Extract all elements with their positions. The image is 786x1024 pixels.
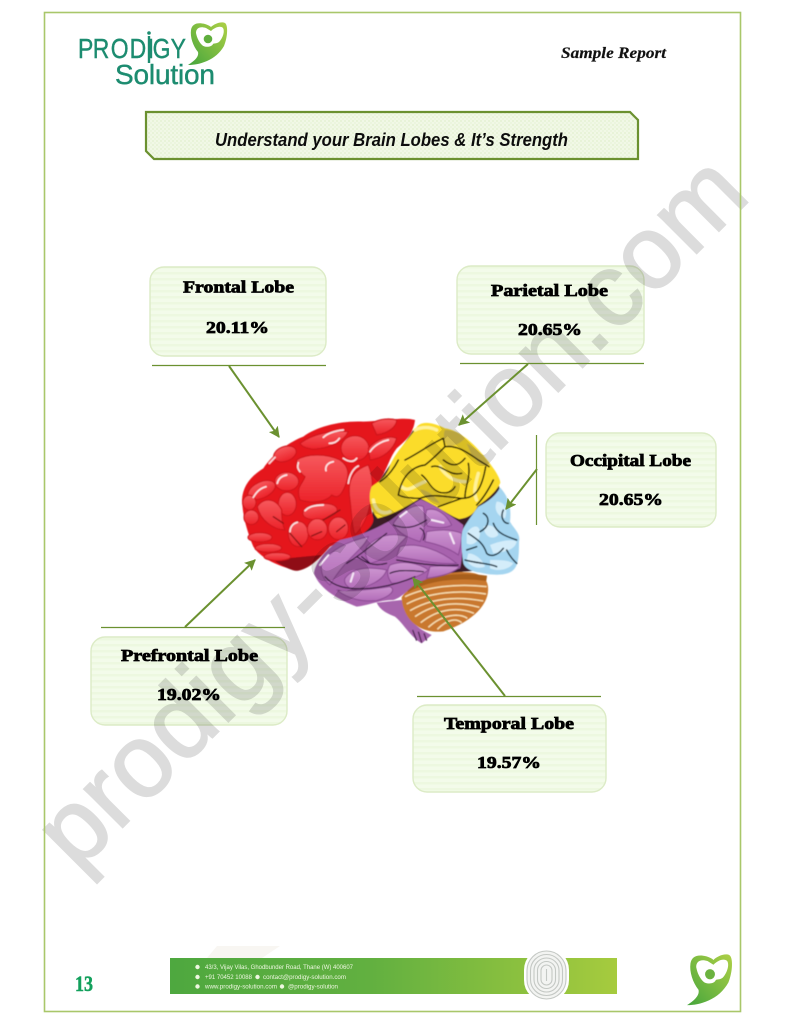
parietal lobe (370, 423, 500, 519)
card: temporal lobe: Temporal Lobe (444, 714, 575, 733)
footer band: @prodigy-solution (288, 984, 338, 990)
occipital lobe (461, 487, 519, 575)
brain stem (377, 600, 432, 643)
footer band: contact@prodigy-solution.com (263, 975, 346, 981)
logo: Prodigy Solution: PRODIGY (78, 34, 186, 65)
card: parietal lobe: Parietal Lobe (491, 281, 609, 300)
card: prefrontal lobe: 19.02% (157, 685, 221, 704)
card: frontal lobe: Frontal Lobe (183, 278, 295, 296)
card: temporal lobe (413, 705, 606, 792)
footer band: +91 70452 10088 (205, 975, 253, 981)
connectors and arrows (101, 364, 644, 696)
frontal lobe (242, 419, 415, 571)
card: occipital lobe: Occipital Lobe (570, 451, 691, 470)
card: occipital lobe (546, 433, 716, 527)
brain illustration (242, 419, 519, 643)
card: frontal lobe (150, 267, 326, 356)
card: frontal lobe: 20.11% (206, 318, 269, 337)
sample report label: Sample Report (561, 45, 667, 62)
cerebellum (402, 572, 488, 632)
footer band: www.prodigy-solution.com (204, 984, 277, 990)
icon: footer heart logo (687, 954, 732, 1005)
title banner: Understand your Brain Lobes & It’s Strength (215, 130, 568, 150)
card: prefrontal lobe: Prefrontal Lobe (121, 646, 259, 665)
card: occipital lobe: 20.65% (599, 490, 663, 509)
card: parietal lobe: 20.65% (518, 320, 582, 339)
footer band: 43/3, Vijay Vilas, Ghodbunder Road, Thane (W) 400607 (205, 965, 354, 971)
icon: fingerprint (525, 949, 568, 1001)
logo: Prodigy Solution (78, 22, 227, 90)
logo: Prodigy Solution: Solution (115, 59, 215, 90)
card: parietal lobe (457, 266, 644, 354)
watermark: prodigy-solution.com (11, 132, 768, 889)
card: temporal lobe: 19.57% (477, 753, 541, 772)
page number: 13 (75, 971, 93, 996)
card: prefrontal lobe (91, 637, 287, 725)
temporal lobe (314, 499, 463, 607)
footer band (170, 946, 617, 1001)
title banner (146, 112, 638, 159)
